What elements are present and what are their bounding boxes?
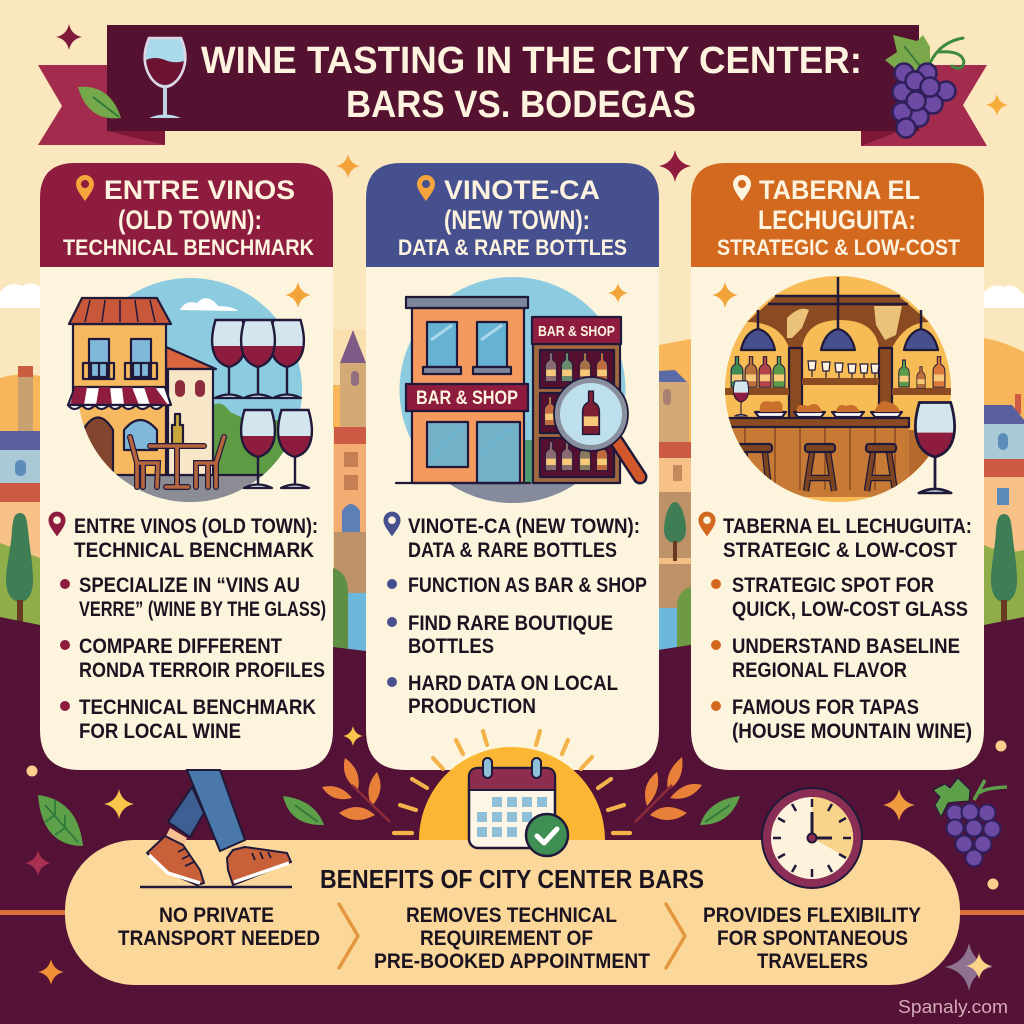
arrow bbox=[339, 904, 358, 968]
panel list text: TABERNA EL LECHUGUITA: bbox=[723, 514, 972, 538]
panel list text: (HOUSE MOUNTAIN WINE) bbox=[732, 719, 972, 743]
bottle shelves bbox=[532, 317, 621, 483]
panel header bbox=[40, 163, 333, 267]
panel list text: DATA & RARE BOTTLES bbox=[408, 538, 617, 562]
panel list text: FUNCTION AS BAR & SHOP bbox=[408, 573, 647, 597]
panel list text: ENTRE VINOS (OLD TOWN): bbox=[74, 514, 318, 538]
panel header: DATA & RARE BOTTLES bbox=[398, 235, 627, 260]
panel header: (NEW TOWN): bbox=[444, 205, 590, 235]
illustration: old town wine bar bbox=[68, 270, 312, 510]
panel header: (OLD TOWN): bbox=[118, 205, 262, 235]
benefit: no booking bbox=[374, 903, 650, 973]
benefit: no booking: REMOVES TECHNICAL bbox=[406, 903, 617, 927]
icon: calendar with check bbox=[469, 758, 568, 856]
panel list text bbox=[383, 512, 647, 718]
icon: clock bbox=[762, 788, 862, 888]
illustration: bar and shop with magnifier bbox=[395, 270, 640, 513]
icon: wine glass bbox=[145, 38, 185, 118]
benefit: no booking: REQUIREMENT OF bbox=[420, 926, 593, 950]
title banner bbox=[38, 25, 987, 146]
panel: Taberna El Lechuguita bbox=[691, 163, 984, 770]
title text: BARS VS. BODEGAS bbox=[346, 84, 696, 126]
panel header: VINOTE-CA bbox=[444, 175, 600, 205]
panel header bbox=[691, 163, 984, 267]
icon: walking legs bbox=[140, 770, 292, 887]
panel list text: BOTTLES bbox=[408, 634, 494, 658]
panel list text: TECHNICAL BENCHMARK bbox=[79, 695, 316, 719]
benefit: no private transport: TRANSPORT NEEDED bbox=[118, 926, 320, 950]
panel list text: SPECIALIZE IN “VINS AU bbox=[79, 573, 300, 597]
bottom decorations: leaves bbox=[38, 757, 740, 846]
panel header: TECHNICAL BENCHMARK bbox=[63, 235, 314, 260]
panel list text bbox=[698, 512, 972, 743]
panel list text: REGIONAL FLAVOR bbox=[732, 658, 907, 682]
watermark: Spanaly.com bbox=[898, 997, 1008, 1017]
benefit: no private transport bbox=[118, 903, 320, 950]
panel list text: COMPARE DIFFERENT bbox=[79, 634, 282, 658]
panel list text: STRATEGIC & LOW-COST bbox=[723, 538, 957, 562]
panel list text: TECHNICAL BENCHMARK bbox=[74, 538, 314, 562]
panel list text: PRODUCTION bbox=[408, 694, 536, 718]
arrow bbox=[666, 904, 685, 968]
benefit: no booking: PRE-BOOKED APPOINTMENT bbox=[374, 949, 650, 973]
panel list text: FOR LOCAL WINE bbox=[79, 719, 241, 743]
panel: Entre Vinos bbox=[40, 163, 333, 770]
shop building bbox=[396, 297, 530, 483]
benefit: no private transport: NO PRIVATE bbox=[159, 903, 274, 927]
bottle shelves: BAR & SHOP bbox=[538, 323, 615, 340]
benefit: flexibility bbox=[703, 903, 921, 973]
ribbon tails bbox=[38, 65, 987, 146]
panel header: LECHUGUITA: bbox=[758, 205, 916, 235]
panel list text: UNDERSTAND BASELINE bbox=[732, 634, 960, 658]
benefits heading: BENEFITS OF CITY CENTER BARS bbox=[320, 864, 704, 894]
panel: Vinote-ca bbox=[366, 163, 659, 770]
icon: grapes bottom right bbox=[933, 778, 1007, 866]
panel list text: QUICK, LOW-COST GLASS bbox=[732, 597, 968, 621]
icon: leaf bbox=[78, 87, 121, 118]
panel list text: STRATEGIC SPOT FOR bbox=[732, 573, 934, 597]
shop building: BAR & SHOP bbox=[416, 388, 518, 409]
panel list text bbox=[48, 512, 326, 743]
panel header: TABERNA EL bbox=[759, 175, 920, 205]
benefit: flexibility: PROVIDES FLEXIBILITY bbox=[703, 903, 921, 927]
panel list text: VINOTE-CA (NEW TOWN): bbox=[408, 514, 640, 538]
magnifying glass bbox=[554, 377, 640, 477]
banner bar bbox=[107, 25, 919, 131]
title text bbox=[201, 40, 862, 126]
panel: benefits of city center bars bbox=[65, 840, 960, 985]
panel list text: FIND RARE BOUTIQUE bbox=[408, 611, 613, 635]
benefit: flexibility: FOR SPONTANEOUS bbox=[717, 926, 908, 950]
panel list text: HARD DATA ON LOCAL bbox=[408, 671, 618, 695]
panel header: STRATEGIC & LOW-COST bbox=[717, 235, 960, 260]
icon: sun rays behind calendar bbox=[394, 731, 630, 840]
icon: grapes bbox=[885, 35, 964, 138]
panel header: ENTRE VINOS bbox=[104, 175, 295, 205]
title text: WINE TASTING IN THE CITY CENTER: bbox=[201, 40, 862, 82]
illustration: tapas bar interior bbox=[712, 270, 960, 510]
benefit: flexibility: TRAVELERS bbox=[757, 949, 868, 973]
panel list text: RONDA TERROIR PROFILES bbox=[79, 658, 325, 682]
panel list text: FAMOUS FOR TAPAS bbox=[732, 695, 919, 719]
panel header bbox=[366, 163, 659, 267]
panel list text: VERRE” (WINE BY THE GLASS) bbox=[79, 597, 326, 621]
